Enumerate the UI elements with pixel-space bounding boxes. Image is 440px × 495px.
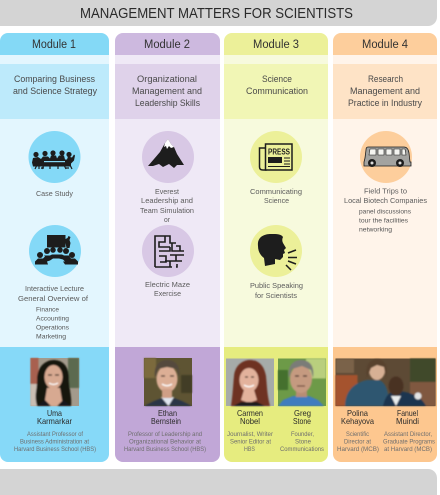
- instructor card: Ethan Bernstein: Organizational Behavior at: [129, 440, 201, 446]
- icon: bus: [360, 131, 412, 183]
- instructor card: Uma Karmarkar: Business Administration at: [20, 440, 89, 446]
- panel: module 4: Practice in Industry: [348, 98, 422, 108]
- panel: module 2: Organizational: [137, 74, 197, 84]
- instructor card: Carmen Nobel and Greg Stone: [224, 347, 328, 462]
- list: field trip activities: [359, 208, 412, 234]
- panel: module 2: Module 2: [144, 39, 190, 51]
- instructor card: Carmen Nobel and Greg Stone: Nobel: [240, 416, 260, 426]
- instructor card: Carmen Nobel and Greg Stone: Stone: [295, 440, 312, 446]
- panel: module 2: Everest: [155, 187, 180, 196]
- panel: module 3: Communicating: [250, 187, 302, 196]
- instructor card: Polina Kehayova and Fanuel Muindi: Harvard (MCB): [337, 447, 379, 453]
- instructor card: Carmen Nobel and Greg Stone: Journalist, Writer: [227, 432, 273, 438]
- list: finance topics: Accounting: [36, 316, 69, 322]
- icon: newspaper: [250, 131, 302, 183]
- instructor card: Ethan Bernstein: Harvard Business School (HBS): [124, 447, 206, 453]
- instructor card: Polina Kehayova and Fanuel Muindi: Polina: [347, 408, 368, 418]
- footer banner: [0, 469, 437, 495]
- panel: module 4: Management and: [350, 86, 420, 96]
- panel: module 2: Leadership and: [141, 196, 193, 205]
- instructor card: Polina Kehayova and Fanuel Muindi: Graduate Programs: [383, 440, 435, 446]
- instructor card: Polina Kehayova and Fanuel Muindi: Kehayova: [341, 416, 374, 426]
- instructor card: Polina Kehayova and Fanuel Muindi: Fanuel: [397, 408, 418, 418]
- panel: module 4: Local Biotech Companies: [344, 196, 427, 205]
- panel: module 2: Exercise: [154, 289, 181, 298]
- panel: module 1: General Overview of: [18, 294, 89, 303]
- instructor card: Polina Kehayova and Fanuel Muindi: [333, 347, 437, 462]
- panel: module 1: and Science Strategy: [13, 86, 97, 96]
- panel: module 3: Science: [262, 74, 292, 84]
- list: field trip activities: networking: [359, 226, 392, 234]
- title banner: [0, 0, 437, 26]
- icon: speaking head: [250, 225, 302, 277]
- icon: maze: [142, 225, 194, 277]
- panel: module 3: Communication: [246, 86, 308, 96]
- photo: Greg Stone: [278, 358, 326, 406]
- panel: module 4: Module 4: [362, 39, 409, 51]
- instructor card: Uma Karmarkar: Assistant Professor of: [27, 432, 83, 438]
- panel: module 1: Interactive Lecture: [25, 284, 84, 293]
- icon: newspaper: PRESS: [268, 148, 291, 156]
- instructor card: Ethan Bernstein: [115, 347, 220, 462]
- instructor card: Carmen Nobel and Greg Stone: Carmen: [237, 408, 263, 418]
- instructor card: Ethan Bernstein: Ethan: [158, 408, 177, 418]
- panel: module 1: [0, 33, 109, 462]
- instructor card: Carmen Nobel and Greg Stone: Stone: [293, 416, 311, 426]
- icon: mountain: [142, 131, 194, 183]
- panel: module 4: [333, 33, 437, 462]
- instructor card: Polina Kehayova and Fanuel Muindi: Scientific: [346, 432, 369, 438]
- instructor card: Polina Kehayova and Fanuel Muindi: Assistant Director,: [384, 432, 432, 438]
- panel: module 3: Science: [264, 196, 289, 205]
- list: finance topics: Marketing: [36, 334, 66, 340]
- instructor card: Carmen Nobel and Greg Stone: Senior Editor at: [230, 440, 271, 446]
- instructor card: Uma Karmarkar: Harvard Business School (HBS): [14, 447, 96, 453]
- instructor card: Uma Karmarkar: Karmarkar: [37, 416, 72, 426]
- icon: case study meeting: [28, 131, 80, 183]
- instructor card: Carmen Nobel and Greg Stone: HBS: [244, 447, 255, 453]
- panel: module 3: [224, 33, 328, 462]
- panel: module 1: Comparing Business: [14, 74, 95, 84]
- panel: module 2: Team Simulation: [140, 206, 194, 215]
- panel: module 1: Case Study: [36, 189, 73, 198]
- instructor card: Polina Kehayova and Fanuel Muindi: at Harvard (MCB): [384, 447, 432, 453]
- instructor card: Uma Karmarkar: [0, 347, 109, 462]
- icon: interactive lecture: [29, 225, 81, 277]
- panel: module 2: Electric Maze: [145, 280, 190, 289]
- instructor card: Ethan Bernstein: Professor of Leadership and: [128, 432, 202, 438]
- panel: module 1: Module 1: [32, 39, 76, 51]
- list: finance topics: [36, 306, 70, 340]
- instructor card: Uma Karmarkar: Uma: [47, 408, 62, 418]
- panel: module 2: Leadership Skills: [135, 98, 200, 108]
- panel: module 2: Management and: [132, 86, 202, 96]
- photo: Uma Karmarkar: [30, 358, 79, 406]
- instructor card: Polina Kehayova and Fanuel Muindi: Muindi: [396, 416, 419, 426]
- photo: Carmen Nobel: [226, 358, 274, 406]
- list: field trip activities: panel discussions: [359, 208, 412, 216]
- photo: Polina Kehayova and Fanuel Muindi: [336, 358, 436, 406]
- list: field trip activities: tour the facilities: [359, 218, 409, 224]
- list: finance topics: Finance: [36, 306, 59, 314]
- panel: module 2: [115, 33, 220, 462]
- panel: module 3: for Scientists: [255, 291, 297, 300]
- photo: Ethan Bernstein: [144, 358, 192, 406]
- instructor card: Carmen Nobel and Greg Stone: Communications: [280, 447, 324, 453]
- panel: module 4: Field Trips to: [364, 186, 407, 196]
- panel: module 3: Public Speaking: [250, 281, 303, 290]
- panel: module 3: Module 3: [253, 39, 299, 51]
- list: finance topics: Operations: [36, 324, 70, 332]
- instructor card: Carmen Nobel and Greg Stone: Greg: [294, 408, 311, 418]
- instructor card: Polina Kehayova and Fanuel Muindi: Director at: [344, 440, 371, 446]
- instructor card: Ethan Bernstein: Bernstein: [151, 416, 181, 426]
- panel: module 2: or: [164, 215, 170, 224]
- instructor card: Carmen Nobel and Greg Stone: Founder,: [291, 432, 314, 438]
- title banner: MANAGEMENT MATTERS FOR SCIENTISTS: [80, 5, 353, 22]
- panel: module 4: Research: [368, 74, 403, 84]
